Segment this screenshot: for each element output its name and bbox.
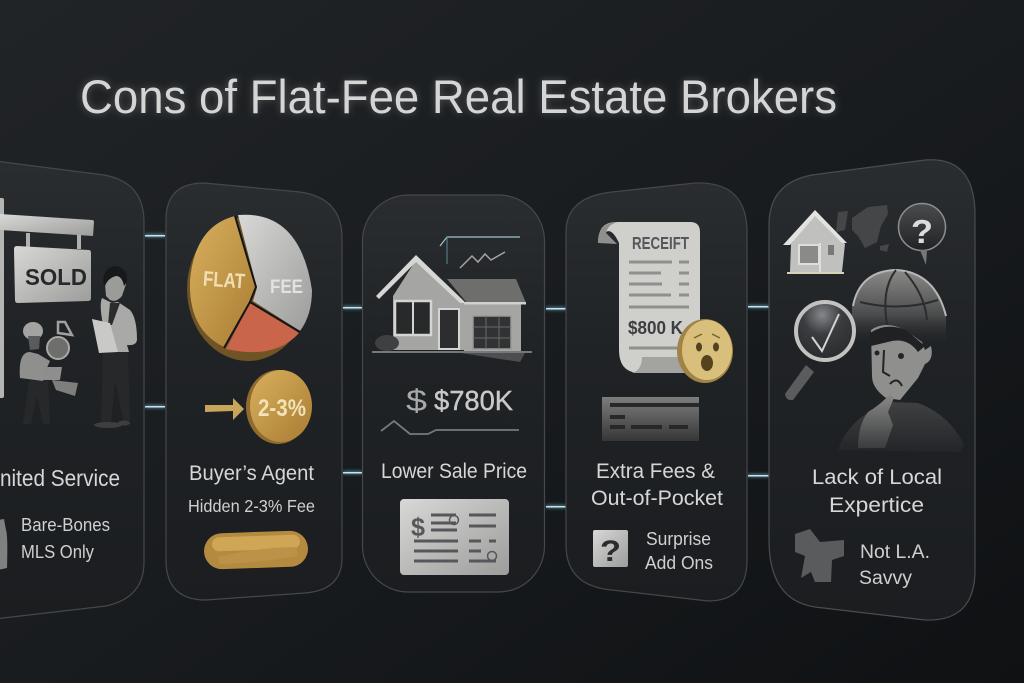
heading: lower sale price: Lower Sale Price: [381, 460, 527, 483]
heading: local expertise: Expertice: [829, 493, 924, 517]
pie label: fee: FEE: [270, 277, 303, 298]
text: hidden fee: Hidden 2-3% Fee: [188, 496, 315, 516]
price: $780K: $: [406, 383, 427, 418]
chart lines: [440, 237, 520, 268]
icon: statement: $: [411, 512, 426, 542]
heading: limited service: nited Service: [0, 465, 120, 491]
icon: statement: [400, 499, 509, 575]
heading: local expertise: [812, 465, 942, 517]
receipt amount: $800 K: [628, 318, 683, 338]
card 5 background: [769, 160, 975, 620]
text: bare-bones: Bare-Bones: [21, 514, 110, 535]
icon: sold sign post: [0, 198, 94, 398]
price trend line: [381, 421, 519, 434]
card 3 background: [362, 195, 544, 592]
coin: 2-3%: [246, 370, 312, 444]
icon: magnifier: [785, 302, 854, 400]
price: $780K: $780K: [434, 385, 513, 416]
panel: lower sale price: [362, 195, 544, 592]
coin: 2-3%: 2-3%: [258, 395, 306, 422]
text: not la savvy: Savvy: [859, 568, 913, 589]
icon: shocked coin: [677, 319, 733, 383]
gold pill: [203, 530, 309, 570]
icon: L.A. map: [795, 529, 844, 582]
text: surprise add ons: Surprise: [646, 529, 711, 549]
heading: extra fees: Out-of-Pocket: [591, 486, 723, 510]
icon: house: [783, 210, 847, 274]
icon: question bubble: ?: [911, 213, 933, 250]
icon: question box: ?: [600, 535, 621, 568]
panel: buyer's agent: [166, 183, 342, 600]
text: bare-bones: MLS Only: [21, 541, 95, 562]
heading: extra fees: [591, 459, 723, 510]
person thinking: [838, 325, 964, 452]
connector lights: [145, 234, 769, 508]
title: Cons of Flat-Fee Real Estate Brokers: [80, 70, 837, 123]
title: Cons of Flat-Fee Real Estate Brokers: [80, 70, 837, 123]
panel: local expertise: [769, 160, 975, 620]
heading: extra fees: Extra Fees &: [596, 459, 715, 483]
card 4 background: [566, 183, 747, 601]
icon: check card: [602, 397, 699, 441]
heading: buyer's agent: Buyer’s Agent: [189, 461, 314, 485]
icon: agent with clipboard: [92, 266, 137, 428]
text: not la savvy: Not L.A.: [860, 542, 930, 563]
icon: globe: [852, 270, 946, 345]
receipt label: RECEIFT: [632, 233, 689, 253]
icon: checklist fragment: [0, 519, 7, 570]
pie chart: [187, 215, 312, 361]
icon: house: [372, 255, 532, 362]
card 1 background: [0, 161, 144, 619]
icon: receipt: [598, 222, 700, 373]
panel: limited service: [0, 161, 144, 619]
price: $780K: [406, 383, 513, 418]
text: surprise add ons: [645, 529, 713, 573]
icon: small worker with gauge: [20, 322, 78, 424]
sold label: SOLD: [25, 264, 87, 290]
text: surprise add ons: Add Ons: [645, 553, 713, 573]
icon: question box: [593, 530, 628, 568]
panel: extra fees: [566, 183, 747, 601]
icon: question bubble: [898, 204, 946, 265]
arrow to coin: [205, 398, 244, 420]
text: not la savvy: [859, 542, 930, 589]
text: bare-bones: [21, 514, 110, 562]
heading: local expertise: Lack of Local: [812, 465, 942, 489]
icon: map blobs: [836, 205, 889, 252]
pie label: flat: FLAT: [202, 268, 246, 293]
card 2 background: [166, 183, 342, 600]
